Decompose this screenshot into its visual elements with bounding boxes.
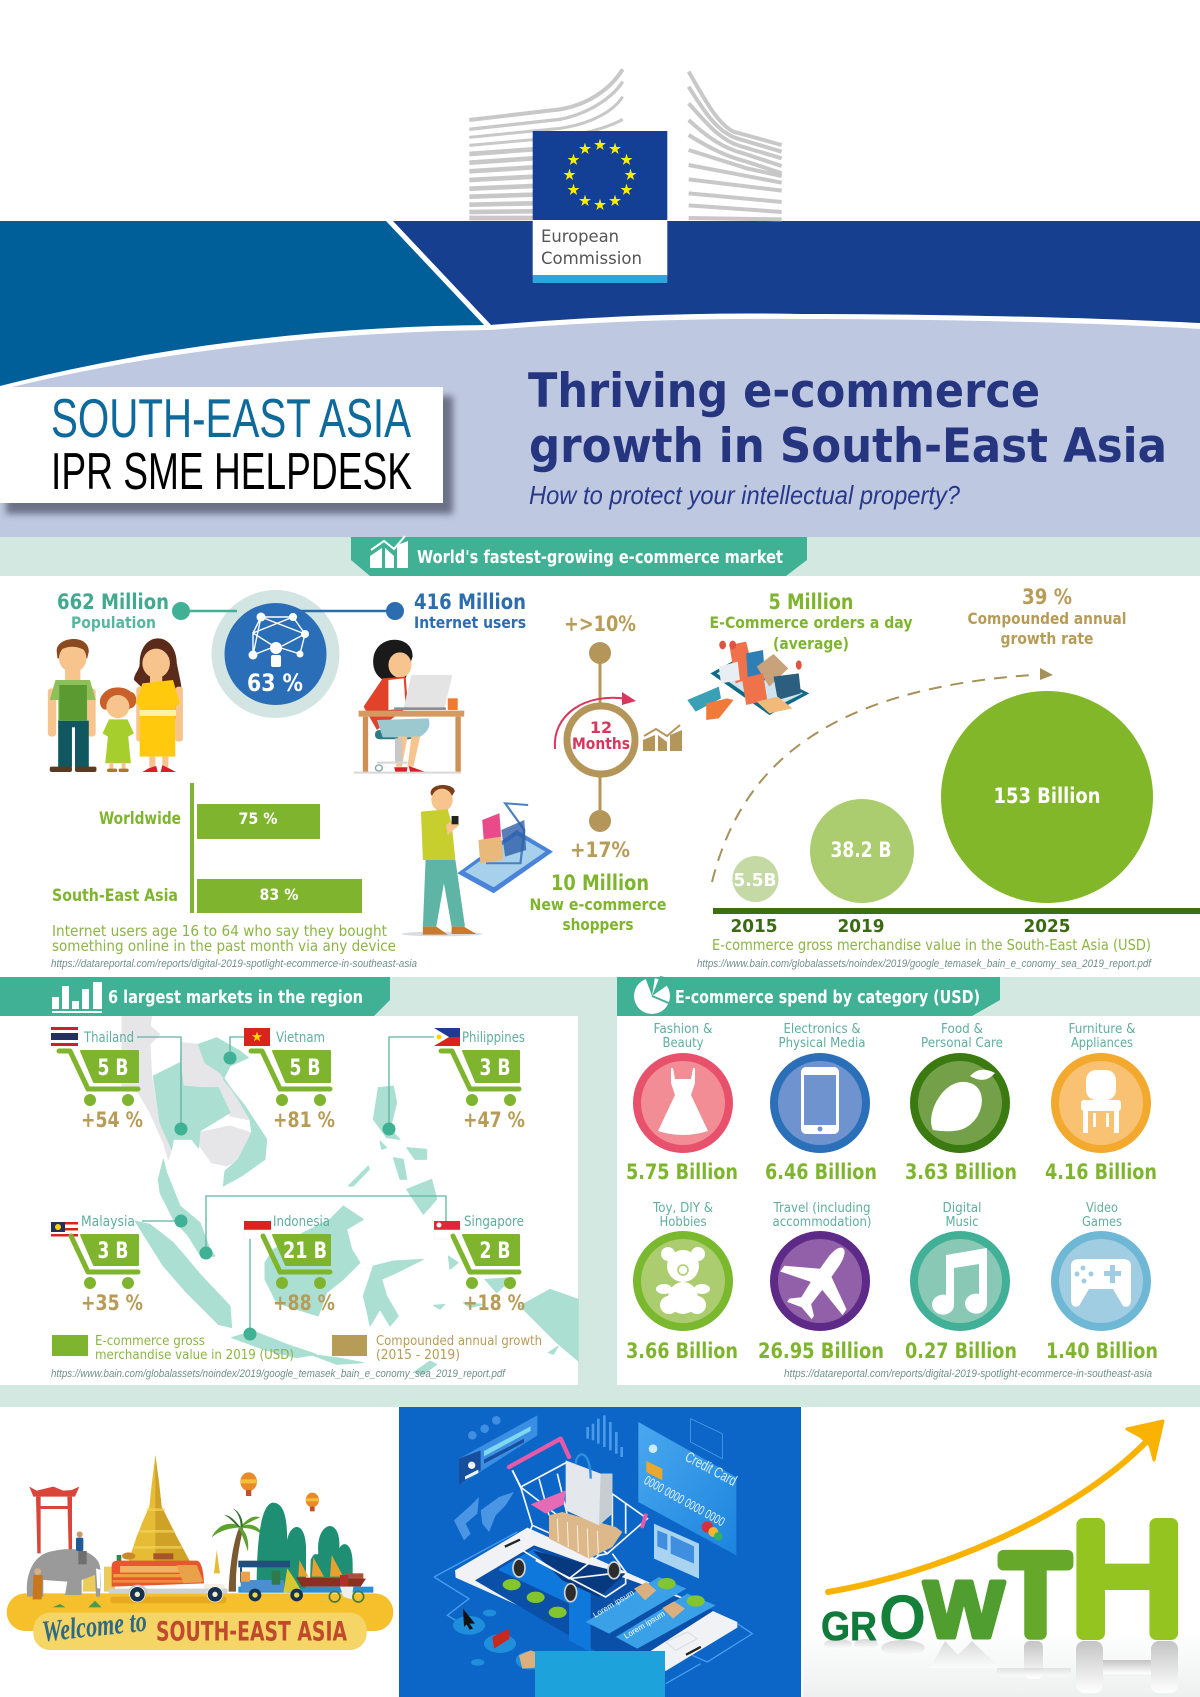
market: Vietnam: Vietnam bbox=[276, 1030, 325, 1046]
timeline: 12 months bbox=[530, 612, 682, 934]
chart: light bars bbox=[586, 1415, 623, 1457]
growth rate arrow: 39 % bbox=[1022, 585, 1072, 609]
European Commission logo: Commission bbox=[541, 249, 642, 268]
market: Philippines: 3 B bbox=[480, 1056, 510, 1081]
bar chart: purchasing: Internet users age 16 to 64 who say they bought bbox=[52, 922, 387, 940]
illustration: online shopping cart bbox=[399, 1407, 801, 1697]
illustration: growth bbox=[803, 1421, 1200, 1697]
bar chart: purchasing: https://datareportal.com/reports/digital-2019-spotlight-ecommerce-in-southeast-asia bbox=[51, 958, 417, 970]
illustration: online shopping cart: Lorem ipsum bbox=[591, 1588, 636, 1620]
illustration: growth: GR bbox=[821, 1603, 877, 1649]
category: Furniture and Appliances bbox=[1045, 1022, 1157, 1184]
category: Electronics and Physical Media: Electronics & bbox=[784, 1022, 860, 1037]
market: Philippines bbox=[382, 1028, 525, 1136]
illustration: welcome to South-East Asia bbox=[7, 1455, 393, 1650]
bubble chart: gross merchandise value: 2015 bbox=[730, 916, 778, 937]
market: Indonesia: 21 B bbox=[283, 1239, 327, 1264]
bar chart: purchasing: South-East Asia bbox=[52, 886, 178, 906]
timeline: 12 months: 10 Million bbox=[551, 871, 649, 895]
icon: growth chart bbox=[370, 536, 408, 568]
market: Vietnam bbox=[224, 1028, 335, 1132]
map legend: Compounded annual growth bbox=[376, 1334, 542, 1349]
illustration: growth: O bbox=[879, 1583, 926, 1653]
timeline: 12 months: +>10% bbox=[564, 612, 636, 636]
orders a day: (average) bbox=[773, 634, 849, 653]
bubble chart: gross merchandise value: 5.5B bbox=[734, 870, 776, 891]
market: Thailand: 5 B bbox=[98, 1056, 128, 1081]
market: Singapore bbox=[200, 1196, 525, 1315]
category: Toy, DIY and Hobbies bbox=[626, 1201, 738, 1363]
helpdesk box: SOUTH-EAST ASIA bbox=[51, 387, 411, 449]
panel: profile card bbox=[459, 1415, 537, 1485]
growth rate arrow: growth rate bbox=[1000, 629, 1094, 648]
timeline: 12 months: Months bbox=[572, 734, 630, 753]
European Commission logo: European bbox=[541, 227, 619, 246]
illustration: online shopping cart: 0000 0000 0000 0000 bbox=[642, 1473, 728, 1529]
category: Digital Music bbox=[905, 1201, 1017, 1363]
category: Digital Music: Music bbox=[946, 1215, 978, 1230]
market: Singapore: +18 % bbox=[463, 1291, 525, 1315]
category: Video Games bbox=[1046, 1201, 1158, 1363]
bubble chart: gross merchandise value: 38.2 B bbox=[830, 838, 892, 862]
population and internet users bbox=[57, 590, 526, 718]
orders a day: E-Commerce orders a day bbox=[710, 613, 913, 632]
map of South-East Asia bbox=[122, 1016, 578, 1374]
section heading: spend by category bbox=[617, 976, 1000, 1016]
icon: network bbox=[248, 612, 309, 667]
illustration: online shopping cart: Lorem ipsum bbox=[622, 1609, 667, 1641]
map legend: (2015 - 2019) bbox=[376, 1348, 460, 1363]
market: Indonesia bbox=[244, 1214, 335, 1340]
icon: bar chart bbox=[52, 982, 102, 1013]
section heading: spend by category: E-commerce spend by category (USD) bbox=[675, 987, 980, 1008]
bubble chart: gross merchandise value: https://www.bain.com/globalassets/noindex/2019/google_temasek_bain_e_conomy_sea_2019_report.pdf bbox=[697, 958, 1152, 970]
category: Food and Personal Care: Personal Care bbox=[921, 1036, 1003, 1051]
market: Philippines: Philippines bbox=[462, 1030, 525, 1046]
category: Travel: accommodation) bbox=[772, 1215, 872, 1230]
market: Thailand: +54 % bbox=[81, 1108, 143, 1132]
icon: pie chart bbox=[634, 976, 672, 1014]
European Commission logo bbox=[469, 69, 782, 283]
category: Electronics and Physical Media: Physical Media bbox=[778, 1036, 866, 1051]
market: Singapore: Singapore bbox=[464, 1214, 524, 1230]
category: Electronics and Physical Media bbox=[765, 1022, 877, 1184]
icon: shopping phone bbox=[687, 641, 809, 720]
illustration: online shopping cart: Credit Card bbox=[682, 1449, 740, 1490]
population and internet users: Internet users bbox=[414, 613, 526, 632]
market: Vietnam: 5 B bbox=[290, 1056, 320, 1081]
category: Toy, DIY and Hobbies: Toy, DIY & bbox=[652, 1201, 713, 1216]
market: Vietnam: +81 % bbox=[273, 1108, 335, 1132]
timeline: 12 months: +17% bbox=[570, 838, 630, 862]
title: How to protect your intellectual property? bbox=[529, 480, 960, 510]
title: growth in South-East Asia bbox=[529, 419, 1167, 474]
category: Digital Music: 0.27 Billion bbox=[905, 1339, 1017, 1363]
category: Travel bbox=[758, 1201, 884, 1363]
population and internet users: 416 Million bbox=[414, 590, 526, 614]
illustration: welcome to South-East Asia: Welcome to bbox=[40, 1605, 148, 1648]
illustration: growth: H bbox=[1070, 1492, 1184, 1667]
population and internet users: 662 Million bbox=[57, 590, 169, 614]
illustration: growth: T bbox=[1001, 1532, 1070, 1658]
market: Indonesia: +88 % bbox=[273, 1291, 335, 1315]
bubble chart: gross merchandise value: 153 Billion bbox=[994, 784, 1100, 808]
category: Food and Personal Care: 3.63 Billion bbox=[905, 1160, 1017, 1184]
category: Travel: Travel (including bbox=[773, 1201, 870, 1216]
illustration: growth: W bbox=[924, 1565, 1005, 1654]
title bbox=[528, 364, 1167, 510]
category: Furniture and Appliances: Furniture & bbox=[1068, 1022, 1136, 1037]
market: Malaysia: Malaysia bbox=[81, 1214, 135, 1230]
growth rate arrow bbox=[712, 585, 1126, 882]
growth rate arrow: Compounded annual bbox=[968, 609, 1126, 628]
population and internet users: Population bbox=[71, 613, 156, 632]
source link: https://datareportal.com/reports/digital-2019-spotlight-ecommerce-in-southeast-asia bbox=[784, 1368, 1152, 1380]
population and internet users: 63 % bbox=[247, 669, 303, 697]
icon: woman at desk bbox=[354, 640, 464, 774]
section heading: 6 largest markets bbox=[0, 977, 390, 1016]
category: Food and Personal Care bbox=[905, 1022, 1017, 1184]
category: Fashion and Beauty: Fashion & bbox=[654, 1022, 712, 1037]
category: Furniture and Appliances: 4.16 Billion bbox=[1045, 1160, 1157, 1184]
market: Thailand bbox=[51, 1027, 188, 1136]
orders a day: 5 Million bbox=[768, 590, 854, 614]
category: Video Games: Games bbox=[1082, 1215, 1122, 1230]
bubble chart: gross merchandise value bbox=[697, 691, 1200, 970]
category: Digital Music: Digital bbox=[942, 1201, 982, 1216]
market: Malaysia bbox=[51, 1214, 188, 1315]
icon: small chart bbox=[643, 725, 682, 751]
category: Furniture and Appliances: Appliances bbox=[1071, 1036, 1133, 1051]
bubble chart: gross merchandise value: 2019 bbox=[838, 916, 884, 937]
category: Toy, DIY and Hobbies: Hobbies bbox=[660, 1215, 707, 1230]
bubble chart: gross merchandise value: 2025 bbox=[1024, 916, 1070, 937]
timeline: 12 months: New e-commerce bbox=[530, 895, 667, 914]
orders a day bbox=[687, 590, 913, 720]
map legend: E-commerce gross bbox=[95, 1334, 205, 1349]
market: Thailand: Thailand bbox=[83, 1030, 134, 1046]
category: Food and Personal Care: Food & bbox=[941, 1022, 983, 1037]
category: Video Games: Video bbox=[1086, 1201, 1118, 1216]
category: Video Games: 1.40 Billion bbox=[1046, 1339, 1158, 1363]
category: Electronics and Physical Media: 6.46 Billion bbox=[765, 1160, 877, 1184]
bar chart: purchasing bbox=[51, 783, 417, 970]
helpdesk box bbox=[0, 387, 453, 514]
section heading: 6 largest markets: 6 largest markets in the region bbox=[108, 987, 363, 1008]
bar chart: purchasing: something online in the past month via any device bbox=[52, 937, 396, 955]
illustration: welcome to South-East Asia: SOUTH-EAST ASIA bbox=[156, 1616, 347, 1648]
category: Toy, DIY and Hobbies: 3.66 Billion bbox=[626, 1339, 738, 1363]
timeline: 12 months: 12 bbox=[590, 718, 612, 737]
panel: form bbox=[654, 1524, 699, 1579]
lower section background bbox=[0, 977, 1200, 1407]
market: Philippines: +47 % bbox=[463, 1108, 525, 1132]
section band: market bbox=[0, 536, 1200, 576]
map legend: https://www.bain.com/globalassets/noindex/2019/google_temasek_bain_e_conomy_sea_2019_report.pdf bbox=[51, 1368, 506, 1380]
timeline: 12 months: shoppers bbox=[562, 915, 634, 934]
category: Fashion and Beauty: 5.75 Billion bbox=[626, 1160, 738, 1184]
icon: shopper with phone bbox=[402, 785, 553, 936]
panel: credit card bbox=[638, 1422, 736, 1555]
market: Indonesia: Indonesia bbox=[273, 1214, 330, 1230]
title: Thriving e-commerce bbox=[528, 364, 1040, 419]
market: Malaysia: 3 B bbox=[98, 1239, 128, 1264]
bar chart: purchasing: 83 % bbox=[260, 885, 298, 904]
category: Travel: 26.95 Billion bbox=[758, 1339, 884, 1363]
header banner bbox=[0, 221, 1200, 537]
helpdesk box: IPR SME HELPDESK bbox=[51, 443, 412, 501]
category: Fashion and Beauty bbox=[626, 1022, 738, 1184]
map legend bbox=[51, 1334, 542, 1380]
category: Fashion and Beauty: Beauty bbox=[662, 1036, 704, 1051]
bar chart: purchasing: Worldwide bbox=[99, 809, 181, 829]
bar chart: purchasing: 75 % bbox=[238, 809, 278, 828]
map legend: merchandise value in 2019 (USD) bbox=[95, 1348, 294, 1363]
market: Singapore: 2 B bbox=[480, 1239, 510, 1264]
icon: family bbox=[48, 638, 183, 772]
market: Malaysia: +35 % bbox=[81, 1291, 143, 1315]
section band: market: World's fastest-growing e-commerce market bbox=[417, 547, 783, 568]
arrow bbox=[828, 1421, 1163, 1592]
